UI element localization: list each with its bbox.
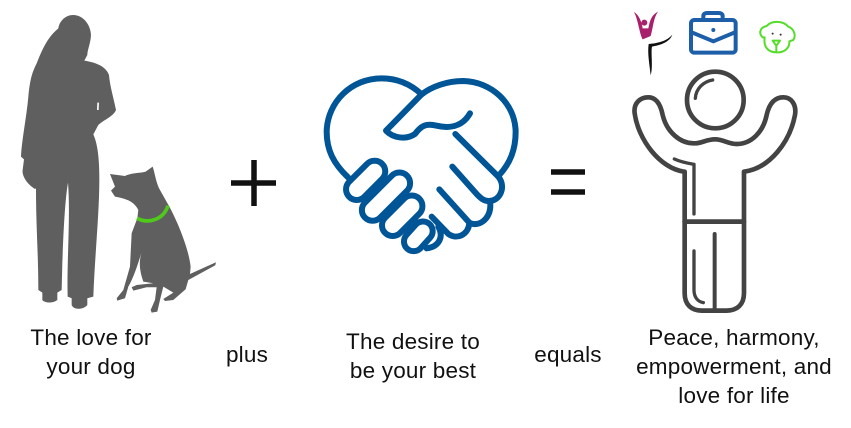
text: peace, harmony, empowerment, and love for life: love for life xyxy=(678,383,790,408)
icon: dancer logo xyxy=(634,12,672,75)
text: equals: equals xyxy=(534,342,602,367)
text: the desire to be your best: The desire to xyxy=(346,329,480,354)
text: the love for your dog xyxy=(30,325,152,379)
text: plus: plus xyxy=(226,342,268,367)
icon: happy person with raised arms xyxy=(634,72,795,311)
text: peace, harmony, empowerment, and love for life: Peace, harmony, xyxy=(648,325,820,350)
icon: plus sign xyxy=(231,160,276,206)
text: the desire to be your best xyxy=(346,329,480,383)
icon: equals sign xyxy=(551,172,585,192)
text: the love for your dog: The love for xyxy=(30,325,152,350)
text: the desire to be your best: be your best xyxy=(350,358,476,383)
icon: sitting dog silhouette xyxy=(110,167,216,313)
text: peace, harmony, empowerment, and love for life: empowerment, and xyxy=(636,354,832,379)
text: peace, harmony, empowerment, and love for life xyxy=(636,325,832,408)
icon: briefcase xyxy=(691,13,736,53)
icon: woman silhouette xyxy=(21,15,116,309)
icon: dog face outline xyxy=(760,22,795,52)
dog collar xyxy=(137,206,168,221)
icon: heart handshake xyxy=(327,78,516,255)
text: the love for your dog: your dog xyxy=(46,354,136,379)
